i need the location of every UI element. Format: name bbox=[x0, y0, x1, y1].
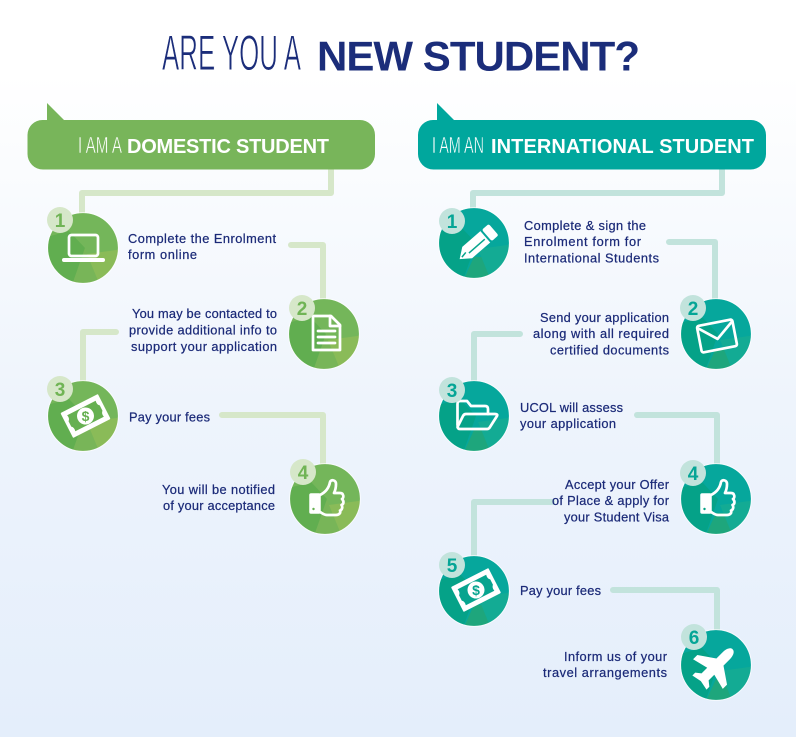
step text bbox=[520, 400, 623, 431]
badge 4: 4 bbox=[298, 463, 309, 484]
step text: along with all required bbox=[533, 326, 669, 341]
step text: UCOL will assess bbox=[520, 400, 623, 415]
international step 5 bbox=[434, 552, 601, 631]
step text: Complete the Enrolment bbox=[128, 231, 276, 246]
international connector lines bbox=[473, 170, 722, 632]
badge 2: 2 bbox=[688, 299, 698, 320]
badge 1 bbox=[47, 207, 73, 233]
badge 3 bbox=[47, 376, 73, 402]
step text: You may be contacted to bbox=[132, 306, 277, 321]
step text: Enrolment form for bbox=[524, 234, 642, 249]
step text: support your application bbox=[131, 339, 277, 354]
badge 1 bbox=[439, 208, 465, 234]
step text: Inform us of your bbox=[564, 649, 668, 664]
domestic step 4 bbox=[162, 459, 365, 539]
badge 3: 3 bbox=[447, 381, 457, 402]
domestic heading bubble: I AM A bbox=[78, 132, 122, 158]
step text: Pay your fees bbox=[520, 583, 601, 598]
icon: thumbs up bbox=[701, 480, 734, 515]
step text: certified documents bbox=[550, 342, 669, 358]
step text: of your acceptance bbox=[163, 498, 275, 513]
international heading bubble: INTERNATIONAL STUDENT bbox=[491, 136, 754, 158]
domestic connector lines bbox=[82, 170, 331, 465]
international heading bubble bbox=[418, 103, 766, 170]
icon: laptop bbox=[62, 235, 105, 262]
domestic step 2 bbox=[129, 295, 364, 374]
international step 2 bbox=[533, 295, 756, 374]
badge 3: 3 bbox=[55, 380, 65, 401]
step text: Accept your Offer bbox=[565, 477, 670, 492]
icon: document bbox=[313, 316, 340, 350]
title: ARE YOU A bbox=[162, 25, 301, 81]
badge 5: 5 bbox=[447, 556, 458, 577]
step text bbox=[128, 231, 276, 262]
badge 2 bbox=[289, 295, 315, 321]
international step 1 bbox=[434, 208, 659, 283]
domestic heading bubble: DOMESTIC STUDENT bbox=[127, 136, 329, 158]
badge 3 bbox=[439, 377, 465, 403]
step text bbox=[524, 218, 659, 266]
icon: folder bbox=[458, 401, 497, 429]
step text: Complete & sign the bbox=[524, 218, 646, 233]
international step 3 bbox=[434, 377, 623, 456]
icon: thumbs up bbox=[310, 480, 343, 515]
step text bbox=[129, 306, 277, 354]
badge 4 bbox=[290, 459, 316, 485]
icon: airplane bbox=[685, 634, 748, 697]
step text: travel arrangements bbox=[543, 665, 667, 680]
icon: banknote bbox=[451, 568, 501, 612]
step text: Send your application bbox=[540, 310, 669, 325]
international heading bubble: I AM AN bbox=[432, 132, 484, 158]
international step 6 bbox=[543, 624, 756, 705]
step text: your application bbox=[520, 416, 616, 431]
icon: banknote bbox=[60, 394, 111, 438]
step text: your Student Visa bbox=[564, 510, 670, 524]
badge 5 bbox=[439, 552, 465, 578]
badge 4: 4 bbox=[688, 464, 699, 485]
international step 4 bbox=[552, 460, 756, 539]
step text: of Place & apply for bbox=[552, 493, 670, 508]
step text bbox=[543, 649, 668, 680]
panel: international student bbox=[418, 103, 766, 705]
step text: form online bbox=[128, 247, 197, 262]
badge 6: 6 bbox=[689, 628, 699, 649]
title bbox=[162, 25, 640, 81]
badge 6 bbox=[681, 624, 707, 650]
badge 1: 1 bbox=[447, 212, 458, 233]
badge 2: 2 bbox=[297, 299, 307, 320]
badge 4 bbox=[680, 460, 706, 486]
step text: International Students bbox=[524, 250, 659, 266]
domestic step 3 bbox=[43, 376, 210, 456]
icon: banknote: $ bbox=[472, 582, 480, 598]
badge 2 bbox=[680, 295, 706, 321]
icon: banknote: $ bbox=[82, 408, 90, 424]
domestic heading bubble bbox=[28, 103, 375, 170]
domestic step 1 bbox=[43, 207, 276, 288]
panel: domestic student bbox=[28, 103, 375, 539]
title: NEW STUDENT? bbox=[317, 32, 640, 80]
step text bbox=[162, 482, 275, 513]
step text bbox=[552, 477, 670, 524]
step text: Pay your fees bbox=[129, 410, 210, 424]
step text: provide additional info to bbox=[129, 322, 277, 338]
step text: You will be notified bbox=[162, 482, 275, 497]
badge 1: 1 bbox=[55, 211, 66, 232]
icon: envelope bbox=[697, 319, 737, 353]
step text bbox=[533, 310, 669, 358]
icon: pencil bbox=[455, 224, 499, 265]
